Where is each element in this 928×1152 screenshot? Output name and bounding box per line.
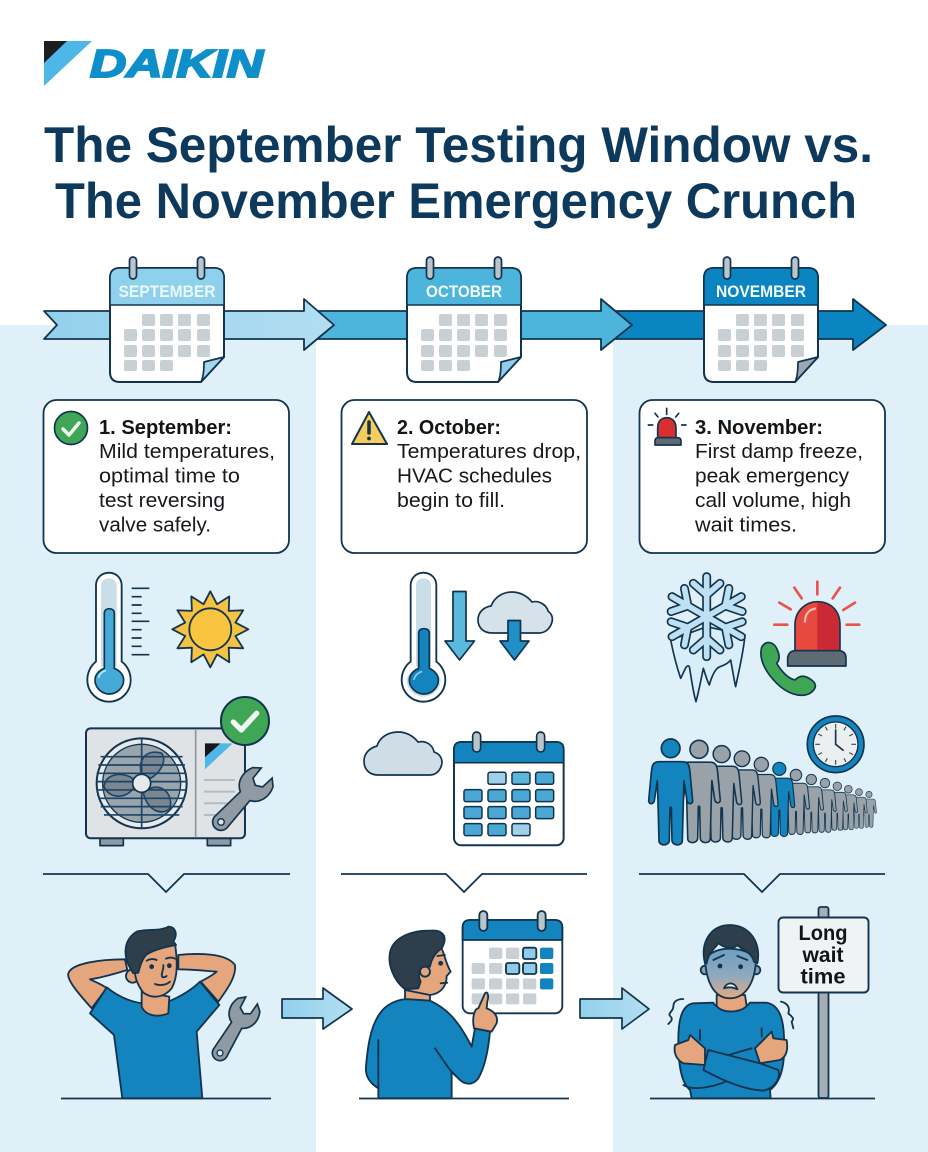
sign: long wait time: Long — [798, 921, 848, 945]
title: The September Testing Window vs. — [44, 117, 873, 173]
calendar: November — [704, 257, 818, 382]
text: November description: wait times. — [694, 514, 797, 536]
text: November description: call volume, high — [695, 489, 851, 512]
icon: wall clock — [807, 716, 864, 773]
calendar: October — [407, 257, 521, 382]
text: October description: begin to fill. — [397, 489, 505, 512]
calendar with filling schedule — [463, 911, 562, 1013]
text: October description: Temperatures drop, — [397, 440, 581, 463]
title — [44, 117, 873, 229]
icon: long queue of people — [649, 739, 876, 845]
sign: long wait time: time — [800, 964, 846, 988]
calendar: September: SEPTEMBER — [118, 283, 216, 301]
icon: thermometer mild — [87, 573, 149, 702]
illustration: cold worried person in November — [668, 925, 793, 1098]
sign: long wait time: wait — [802, 943, 844, 967]
timeline arrow: October segment — [315, 299, 632, 350]
sign: long wait time — [778, 907, 868, 1098]
divider chevron: September — [43, 874, 290, 892]
text: September description — [99, 416, 275, 536]
text: October description: 2. October: — [397, 416, 501, 439]
icon: red emergency beacon — [774, 582, 859, 666]
card: November — [640, 400, 885, 553]
card: September — [44, 400, 289, 553]
timeline arrow: November segment — [610, 299, 886, 350]
background panel: November column — [613, 325, 928, 1152]
icon: green check — [54, 412, 88, 444]
title: The November Emergency Crunch — [55, 173, 857, 229]
icon: thermometer falling — [402, 573, 445, 702]
text: November description: First damp freeze, — [695, 440, 863, 463]
icon: busy calendar — [454, 732, 564, 845]
logo: Daikin — [44, 41, 264, 86]
calendar: September — [110, 257, 224, 382]
icon: wrench on AC unit — [203, 762, 278, 839]
divider chevron: November — [639, 874, 885, 892]
arrow: October to November — [580, 988, 649, 1029]
ground line: September — [61, 1098, 271, 1100]
illustration: person checking the calendar in October — [366, 911, 562, 1098]
text: September description: test reversing — [99, 489, 225, 512]
text: September description: 1. September: — [99, 416, 232, 439]
icon: warning triangle — [352, 412, 387, 444]
icon: green phone — [761, 643, 815, 695]
icon: wrench beside person — [203, 993, 264, 1067]
icon: outdoor AC unit with check and wrench — [86, 697, 269, 846]
calendar: November: NOVEMBER — [716, 283, 806, 301]
ground line: November — [650, 1098, 875, 1100]
divider chevron: October — [341, 874, 587, 892]
card: October — [342, 400, 587, 553]
ground line: October — [359, 1098, 569, 1100]
background panel: September column — [0, 325, 316, 1152]
logo: Daikin: DAIKIN — [90, 43, 264, 86]
timeline arrow: September segment — [44, 299, 334, 350]
text: November description: peak emergency — [695, 464, 850, 488]
calendar: October: OCTOBER — [426, 283, 502, 301]
icon: snowflake with icicles — [665, 577, 748, 702]
text: November description: 3. November: — [695, 416, 823, 439]
illustration: relaxed person in September — [68, 927, 235, 1098]
icon: cloud with down arrow — [478, 592, 552, 660]
text: September description: valve safely. — [99, 514, 211, 536]
text: September description: optimal time to — [99, 464, 240, 488]
text: October description: HVAC schedules — [397, 464, 552, 488]
arrow: temperature drop — [445, 592, 474, 660]
text: October description — [397, 416, 581, 512]
text: September description: Mild temperatures, — [99, 440, 275, 463]
icon: sun — [172, 591, 248, 667]
icon: red alarm beacon — [648, 408, 686, 445]
arrow: September to October — [282, 988, 352, 1029]
text: November description — [694, 416, 863, 536]
icon: cloud — [364, 732, 442, 775]
